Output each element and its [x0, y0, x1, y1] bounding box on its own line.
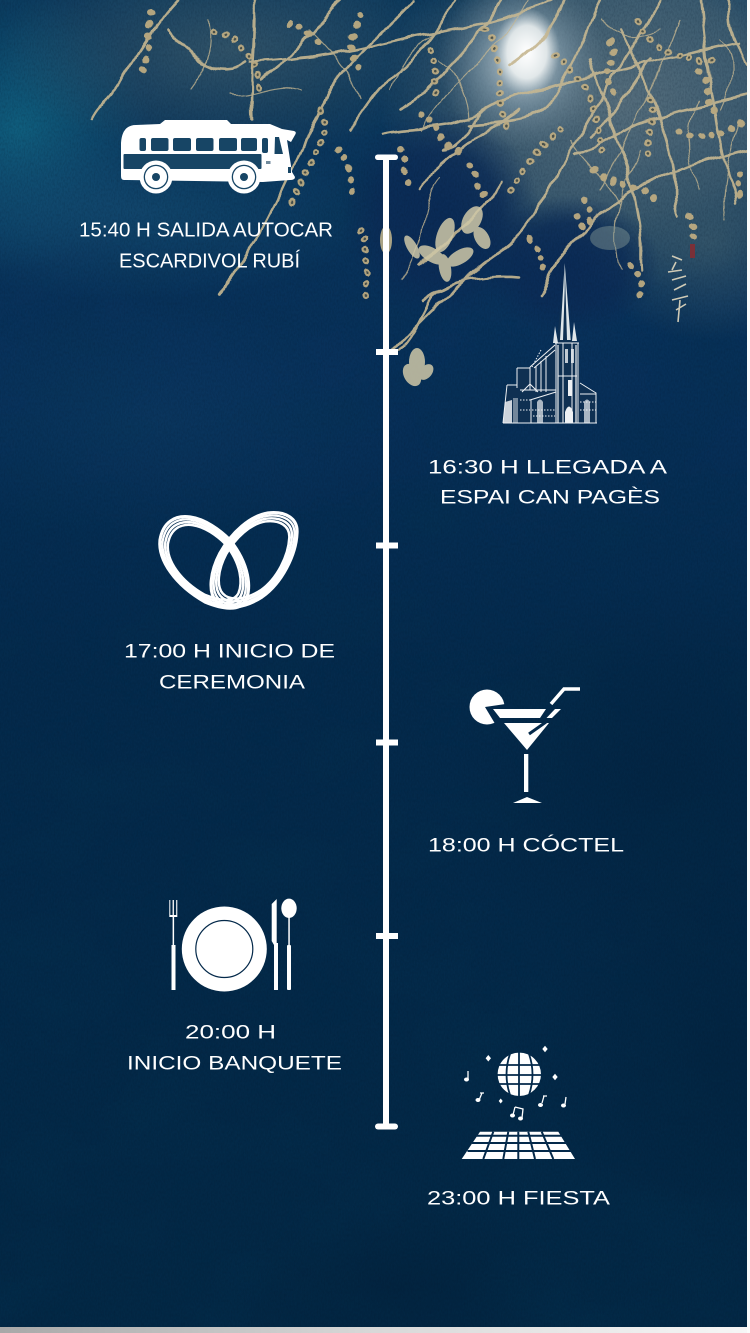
- right edge strip: [747, 0, 750, 1333]
- label: [127, 1022, 342, 1074]
- icon: bus: [121, 120, 296, 194]
- icon: plate: [182, 906, 267, 992]
- label: [79, 220, 333, 272]
- item: party 23:00: [427, 1046, 610, 1210]
- icon: music notes and sparkles: [464, 1046, 566, 1120]
- icon: knife: [272, 899, 278, 990]
- label: 15:40 H SALIDA AUTOCAR: [79, 220, 333, 242]
- moon glow: [437, 0, 607, 150]
- label: CEREMONIA: [159, 672, 305, 694]
- item: banquet 20:00: [127, 899, 342, 1074]
- icon: plate and cutlery: [169, 899, 297, 992]
- label: INICIO BANQUETE: [127, 1054, 342, 1074]
- blossoms: outer petals: [140, 15, 745, 300]
- blossoms: dark centres: [215, 20, 715, 300]
- label: 20:00 H: [185, 1022, 276, 1044]
- calligraphic seal: [668, 244, 695, 322]
- icon: church: [503, 263, 597, 423]
- bottom strip: [0, 1327, 750, 1333]
- item: bus 15:40: [79, 120, 333, 272]
- label: 23:00 H FIESTA: [427, 1188, 610, 1210]
- label: 18:00 H CÓCTEL: [428, 834, 624, 856]
- item: venue 16:30: [428, 263, 667, 508]
- icon: disco ball and dance floor: [462, 1046, 575, 1159]
- icon: spoon: [281, 899, 297, 990]
- label: 17:00 H INICIO DE: [124, 642, 335, 662]
- icon: cocktail glass: [470, 689, 580, 803]
- icon: wedding rings: [160, 513, 297, 608]
- item: ceremony 17:00: [124, 513, 335, 694]
- icon: fork: [169, 900, 177, 990]
- icon: dance floor: [462, 1132, 575, 1159]
- label: ESPAI CAN PAGÈS: [440, 488, 660, 508]
- golden blossom branches: [92, 0, 750, 350]
- label: 16:30 H LLEGADA A: [428, 458, 667, 478]
- label: [124, 642, 335, 694]
- label: [428, 458, 667, 508]
- item: cocktail 18:00: [428, 689, 624, 856]
- timeline: [375, 154, 398, 1130]
- label: ESCARDIVOL RUBÍ: [119, 250, 300, 272]
- icon: disco ball: [498, 1052, 541, 1096]
- pale flowers on the branch: [380, 203, 630, 389]
